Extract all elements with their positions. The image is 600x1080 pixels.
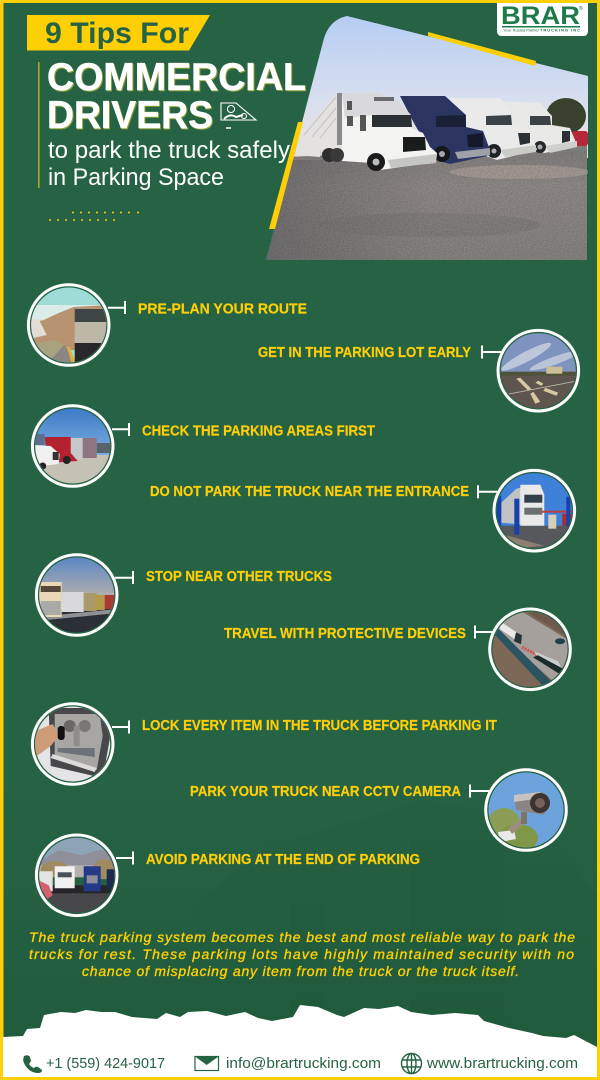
truck three <box>450 98 537 160</box>
tip 2: get in the parking lot early: GET IN THE PARKING LOT EARLY <box>258 345 471 361</box>
tip 1: pre-plan your route: PRE-PLAN YOUR ROUTE <box>138 302 307 318</box>
decorative dots <box>49 212 139 221</box>
bottom border <box>0 1077 600 1080</box>
closing paragraph: trucks for rest. These parking lots have highly maintained security with no <box>29 946 574 962</box>
yellow accent stripe left <box>269 122 303 229</box>
tip 6: travel with protective devices <box>224 608 572 692</box>
logo: TRUCKING INC <box>540 28 580 32</box>
icon: phone <box>23 1055 42 1073</box>
tip 3: check the parking areas first: CHECK THE PARKING AREAS FIRST <box>142 424 375 440</box>
footer: website: www.brartrucking.com <box>426 1055 578 1072</box>
title block: COMMERCIAL <box>47 56 306 99</box>
tip 5: stop near other trucks <box>36 555 332 636</box>
left border <box>0 0 4 1080</box>
tip 3: check the parking areas first <box>32 406 375 487</box>
logo: ® <box>579 5 583 12</box>
icon: globe <box>402 1054 422 1074</box>
title block: in Parking Space <box>48 164 224 191</box>
tip 2: get in the parking lot early <box>258 330 580 411</box>
right border <box>597 0 600 1080</box>
tip 1: pre-plan your route <box>28 285 307 365</box>
top border <box>0 0 600 3</box>
tip 6: travel with protective devices: TRAVEL WITH PROTECTIVE DEVICES <box>224 626 466 642</box>
hero photo: parked trucks <box>260 10 590 262</box>
footer: email: info@brartrucking.com <box>226 1055 381 1072</box>
closing paragraph <box>29 929 575 979</box>
title block: DRIVERS <box>47 94 213 137</box>
truck two: navy <box>400 96 490 164</box>
tip 9: avoid parking at the end of parking: AVOID PARKING AT THE END OF PARKING <box>146 852 420 868</box>
logo: Your Trusted Partner <box>503 28 540 32</box>
truck four <box>503 102 577 153</box>
tip 9: avoid parking at the end of parking <box>36 835 420 916</box>
tip 4: do not park the truck near the entrance: DO NOT PARK THE TRUCK NEAR THE ENTRANCE <box>150 484 469 500</box>
tip 4: do not park the truck near the entrance <box>150 470 575 551</box>
title block <box>38 56 306 191</box>
tip 7: lock every item in the truck: LOCK EVERY ITEM IN THE TRUCK BEFORE PARKING IT <box>142 718 497 734</box>
tip 7: lock every item in the truck <box>32 704 497 784</box>
closing paragraph: The truck parking system becomes the best and most reliable way to park the <box>29 929 575 945</box>
icon: driver at steering wheel <box>221 103 256 128</box>
tree and red car <box>546 98 588 146</box>
footer: phone: +1 (559) 424-9017 <box>46 1055 165 1072</box>
logo: BRAR <box>501 2 580 30</box>
logo <box>497 2 588 36</box>
yellow accent stripe top <box>428 32 536 66</box>
tip 5: stop near other trucks: STOP NEAR OTHER TRUCKS <box>146 569 332 585</box>
banner: 9 Tips For: 9 Tips For <box>45 17 189 50</box>
tip 8: park your truck near cctv camera <box>190 770 566 852</box>
tip 8: park your truck near cctv camera: PARK YOUR TRUCK NEAR CCTV CAMERA <box>190 784 461 800</box>
footer torn white panel <box>3 1005 597 1077</box>
closing paragraph: chance of misplacing any item from the truck or the truck itself. <box>82 963 519 979</box>
title block: to park the truck safely <box>48 137 290 164</box>
icon: envelope <box>195 1056 218 1070</box>
truck one: white with trailer <box>296 92 437 171</box>
